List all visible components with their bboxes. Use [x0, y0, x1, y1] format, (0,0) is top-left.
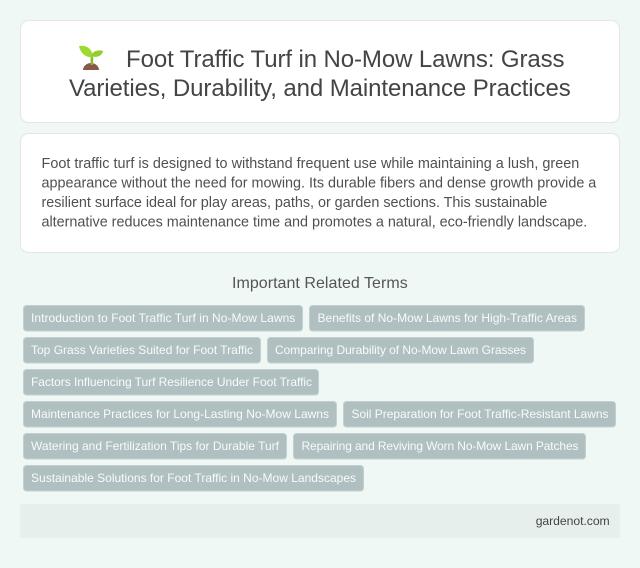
tag	[24, 402, 336, 427]
text block: description	[42, 156, 596, 230]
text block: description: resilient surface ideal for play areas, paths, or garden sections. This sustainable	[42, 195, 547, 211]
text block: description: appearance without the need for mowing. Its durable fibers and dense growth provide a	[42, 176, 596, 192]
title: Foot Traffic Turf in No-Mow Lawns: Grass	[126, 46, 564, 73]
tag	[294, 434, 586, 459]
tag	[344, 402, 616, 427]
tag	[310, 306, 584, 331]
tag: Sustainable Solutions for Foot Traffic in No-Mow Landscapes	[31, 471, 356, 485]
tag: Maintenance Practices for Long-Lasting No-Mow Lawns	[31, 407, 329, 421]
heading: important related terms: Important Related Terms	[232, 275, 408, 292]
title: Varieties, Durability, and Maintenance Practices	[69, 75, 571, 102]
tag	[24, 466, 364, 491]
tag	[24, 306, 302, 331]
panel: header	[20, 20, 620, 122]
tag	[24, 338, 260, 363]
text block: description: alternative reduces maintenance time and promotes a natural, eco-friendly landscape.	[42, 214, 587, 230]
tag: Comparing Durability of No-Mow Lawn Grasses	[275, 343, 526, 357]
tag	[24, 434, 286, 459]
tag: Repairing and Reviving Worn No-Mow Lawn Patches	[302, 439, 578, 453]
tag	[24, 370, 318, 395]
tag: Soil Preparation for Foot Traffic-Resistant Lawns	[352, 407, 608, 421]
tag	[268, 338, 534, 363]
footer bar	[20, 504, 620, 538]
tag: Introduction to Foot Traffic Turf in No-Mow Lawns	[31, 311, 295, 325]
tag: Watering and Fertilization Tips for Durable Turf	[31, 439, 280, 453]
tag: Top Grass Varieties Suited for Foot Traffic	[31, 343, 253, 357]
icon: seedling	[79, 46, 103, 70]
text block: description: Foot traffic turf is designed to withstand frequent use while maintaining a lush, green	[42, 156, 579, 172]
footer source: gardenot.com	[536, 514, 610, 528]
title	[69, 46, 571, 102]
panel: description	[20, 134, 620, 252]
tag list	[24, 306, 616, 491]
tag: Factors Influencing Turf Resilience Under Foot Traffic	[31, 375, 312, 389]
tag: Benefits of No-Mow Lawns for High-Traffic Areas	[318, 311, 577, 325]
